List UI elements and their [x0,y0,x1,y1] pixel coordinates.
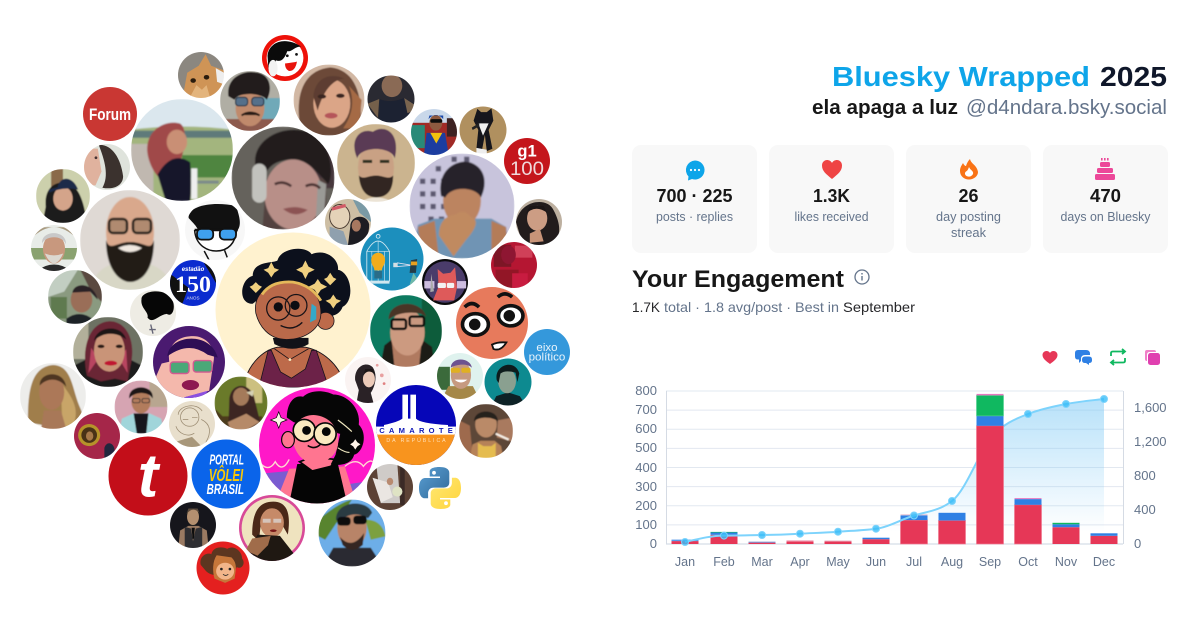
left axis labels: 800 [635,383,657,398]
stat card: day posting streak: streak [951,225,986,240]
stat card: posts and replies: posts · replies [656,209,733,224]
avatar: woman drinking [214,376,268,430]
chart legend [1042,349,1160,365]
avatar: Forum logo [83,87,137,141]
stat card: days on Bluesky: 470 [1090,186,1121,206]
avatar: eixo politico logo: eixo [536,342,558,354]
title: Bluesky Wrapped [832,61,1090,92]
avatar: dark-haired woman profile [84,144,130,190]
avatar: woman with navy cap [36,169,90,223]
engagement summary [632,299,915,315]
left axis labels: 400 [635,460,657,475]
left axis labels: 0 [650,536,657,551]
icon: info [855,270,869,284]
avatar: Forum logo: Forum [89,105,131,124]
avatar: eixo politico logo [524,329,570,375]
stat card: posts and replies [632,145,757,253]
month labels: Sep [979,555,1001,569]
avatar: dark portrait [368,75,414,122]
left axis labels: 200 [635,498,657,513]
stat card: likes received [769,145,894,253]
avatar: black and white cat [460,106,506,154]
avatar: main profile illustration [216,232,370,388]
avatar: woman with white headphones [232,126,334,230]
right axis labels: 0 [1134,536,1141,551]
avatar: Portal Volei Brasil logo: PORTAL [209,452,244,468]
month labels: Feb [713,555,735,569]
avatar: purple-haired illustration with shades [153,326,225,398]
stat card: days on Bluesky: days on Bluesky [1060,209,1151,224]
right axis labels: 400 [1134,502,1156,517]
avatar: woman with magenta hair [73,317,143,387]
avatar: Camarote da Republica logo: CAMAROTE [379,426,453,435]
left axis labels: 700 [635,402,657,417]
month labels: Jun [866,555,886,569]
avatar: older man with white hair [31,225,77,271]
user name and handle: ela apaga a luz [812,97,958,119]
month labels: Mar [751,555,773,569]
avatar: g1 100 logo [504,138,550,184]
avatar: man with black glasses on green [370,295,442,367]
icon: flame [960,159,978,180]
avatar: 150 anniversary logo: ANOS [186,296,200,301]
avatar: bald bearded man [80,190,180,290]
avatar: sunglasses cartoon [188,204,240,260]
icon: chat bubble [686,160,705,180]
avatar: 150 anniversary logo: estadão [182,267,205,273]
title: 2025 [1100,61,1167,92]
avatar: pink and black-haired cartoon [259,388,375,504]
cumulative line points [682,396,1108,546]
avatar: eixo politico logo: político [529,351,566,363]
stat card: day posting streak: day posting [936,209,1001,224]
engagement summary: total · 1.8 avg/post · Best in [664,299,839,315]
avatar: cartoon woman with pink ring [239,495,305,561]
right axis labels: 800 [1134,468,1156,483]
stat card: likes received: 1.3K [813,186,850,206]
avatar: Portal Volei Brasil logo [192,440,260,508]
stacked bars Sep to Dec [976,394,1118,544]
right axis labels [1134,400,1167,551]
avatar: woman close-up [294,64,364,136]
avatar: curly pink-hair woman [131,99,233,201]
avatar: 150 anniversary logo: 150 [175,272,211,297]
avatar: Portal Volei Brasil logo: BRASIL [207,482,244,498]
stat card: likes received: likes received [794,209,868,224]
avatar: Tumblr-style t logo [108,436,188,516]
engagement summary: September [843,299,915,315]
engagement chart [635,383,1167,569]
icon: Python logo [419,467,461,509]
avatar: man with headphones among plants [48,270,102,324]
stat card: day posting streak: 26 [958,186,978,206]
avatar: man in floral blazer [114,380,168,434]
engagement summary: 1.7K [632,299,661,315]
icon: legend repost [1111,349,1125,365]
avatar: Camarote da Republica logo [376,385,456,465]
avatar: g1 100 logo: 100 [510,159,544,180]
month labels: Apr [790,555,810,569]
icon: legend reply [1075,350,1092,365]
cumulative line [685,399,1104,542]
avatar: 150 anniversary logo [170,260,216,306]
avatar: red ring cartoon [262,35,308,81]
avatar: comic art man [325,199,371,245]
title [832,61,1167,92]
avatar cloud [20,35,570,594]
left axis labels [635,383,657,551]
avatar: red curly-hair cartoon [196,542,250,594]
month labels: Dec [1093,555,1115,569]
avatar: man with blue glasses [220,71,280,131]
avatar: child in yellow tank top [459,404,513,458]
avatar: Portal Volei Brasil logo: VÔLEI [209,465,244,485]
avatar: yellow sunglasses person [437,353,483,399]
avatar: man covering mouth [410,154,514,258]
avatar: man in cap and sunglasses [318,500,386,566]
avatar: orange cat [178,52,224,98]
stat card: posts and replies: 700 · 225 [656,186,732,206]
avatar: sketch woman with flowers [345,357,391,403]
avatar: superman shirt [411,109,457,155]
avatar: blonde woman [20,363,86,429]
icon: legend quote [1145,350,1160,365]
month labels: Nov [1055,555,1078,569]
icon: heart [822,160,842,179]
avatar: man with purple hair [337,124,415,202]
avatar: birdcage lightbulb illustration [360,228,424,290]
avatar: Tumblr-style t logo: t [138,442,161,511]
avatar: teal portrait [484,358,532,406]
stacked bars Jan to Aug [672,513,966,544]
stat card: day posting streak [906,145,1031,253]
month labels: May [826,555,851,569]
left axis labels: 300 [635,479,657,494]
cumulative area [685,399,1104,544]
icon: cake [1095,158,1115,180]
avatar: red fox cartoon [422,259,468,305]
user name and handle: @d4ndara.bsky.social [966,97,1167,119]
avatar: black hair cartoon [130,290,176,336]
left axis labels: 100 [635,517,657,532]
right axis labels: 1,600 [1134,400,1167,415]
avatar: pencil sketch [169,401,215,447]
stat card: days on Bluesky [1043,145,1168,253]
month labels: Jan [675,555,695,569]
avatar: orange cartoon face [456,287,528,359]
avatar: red-tinted poster [491,242,537,288]
month labels: Oct [1018,555,1038,569]
avatar: g1 100 logo: g1 [517,141,537,160]
avatar: wedding photo [367,464,413,510]
left axis labels: 500 [635,440,657,455]
left axis labels: 600 [635,421,657,436]
month labels [675,555,1115,569]
user name and handle [812,97,1167,119]
month labels: Jul [906,555,922,569]
avatar: medusa shield [74,413,120,459]
avatar: woman with dark wavy hair [516,199,562,245]
avatar: Camarote da Republica logo: DA REPÚBLICA [386,437,446,444]
avatar: man in vest [170,502,216,548]
chart gridlines [666,391,1124,544]
right axis labels: 1,200 [1134,434,1167,449]
icon: legend like [1042,351,1058,364]
month labels: Aug [941,555,963,569]
heading: Your Engagement: Your Engagement [632,266,844,293]
